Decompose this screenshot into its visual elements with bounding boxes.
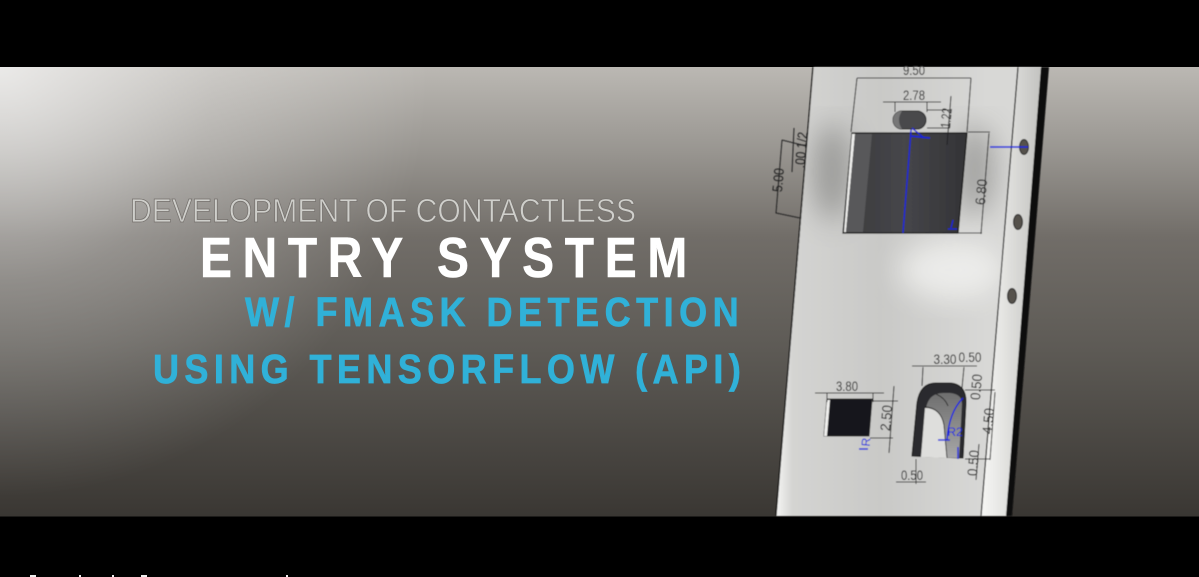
dimension labels (769, 62, 997, 483)
screw holes (1008, 140, 1028, 304)
dimension labels: 0.50 (958, 349, 982, 365)
small square cutout (824, 399, 872, 436)
title line 3: W/ FMASK DETECTION (245, 290, 739, 336)
plate dark edge (1006, 67, 1049, 516)
clipped caption at bottom edge (30, 575, 288, 577)
plate side flange (981, 67, 1041, 516)
dimension labels: R2 (947, 425, 963, 439)
dimension labels: 5.00 (769, 167, 787, 193)
background panel (0, 67, 1199, 516)
dimension labels: 4.50 (979, 407, 997, 435)
dimension lines (776, 78, 995, 484)
dimension labels: 0.50 (901, 467, 923, 483)
plate front face (776, 67, 1018, 516)
title line 1: DEVELOPMENT OF CONTACTLESS (130, 192, 636, 229)
dimension labels: 3.80 (836, 378, 858, 394)
blue relation marks (859, 136, 1028, 459)
dimension labels: 0.50 (967, 373, 985, 401)
arched cutout (912, 383, 966, 458)
title line 4: USING TENSORFLOW (API) (153, 347, 741, 393)
large rectangular cutout (843, 118, 967, 233)
dimension labels: R (859, 437, 873, 447)
dimension labels: 9.50 (903, 62, 925, 78)
title line 2: ENTRY SYSTEM (200, 226, 687, 290)
drawing of enclosure plate (769, 62, 1049, 516)
dimension labels: 2.50 (877, 404, 895, 432)
cloud reflections (812, 124, 1002, 300)
dimension labels: 6.80 (972, 178, 990, 206)
dimension labels: 0.50 (964, 449, 982, 477)
dimension labels: 3.30 (934, 351, 957, 367)
dimension labels: 1.22 (937, 107, 955, 129)
dimension labels: .00 1/2 (791, 131, 811, 169)
dimension labels: 2.78 (903, 87, 925, 103)
slot cutout (893, 111, 926, 138)
plate outlines (776, 67, 1018, 516)
